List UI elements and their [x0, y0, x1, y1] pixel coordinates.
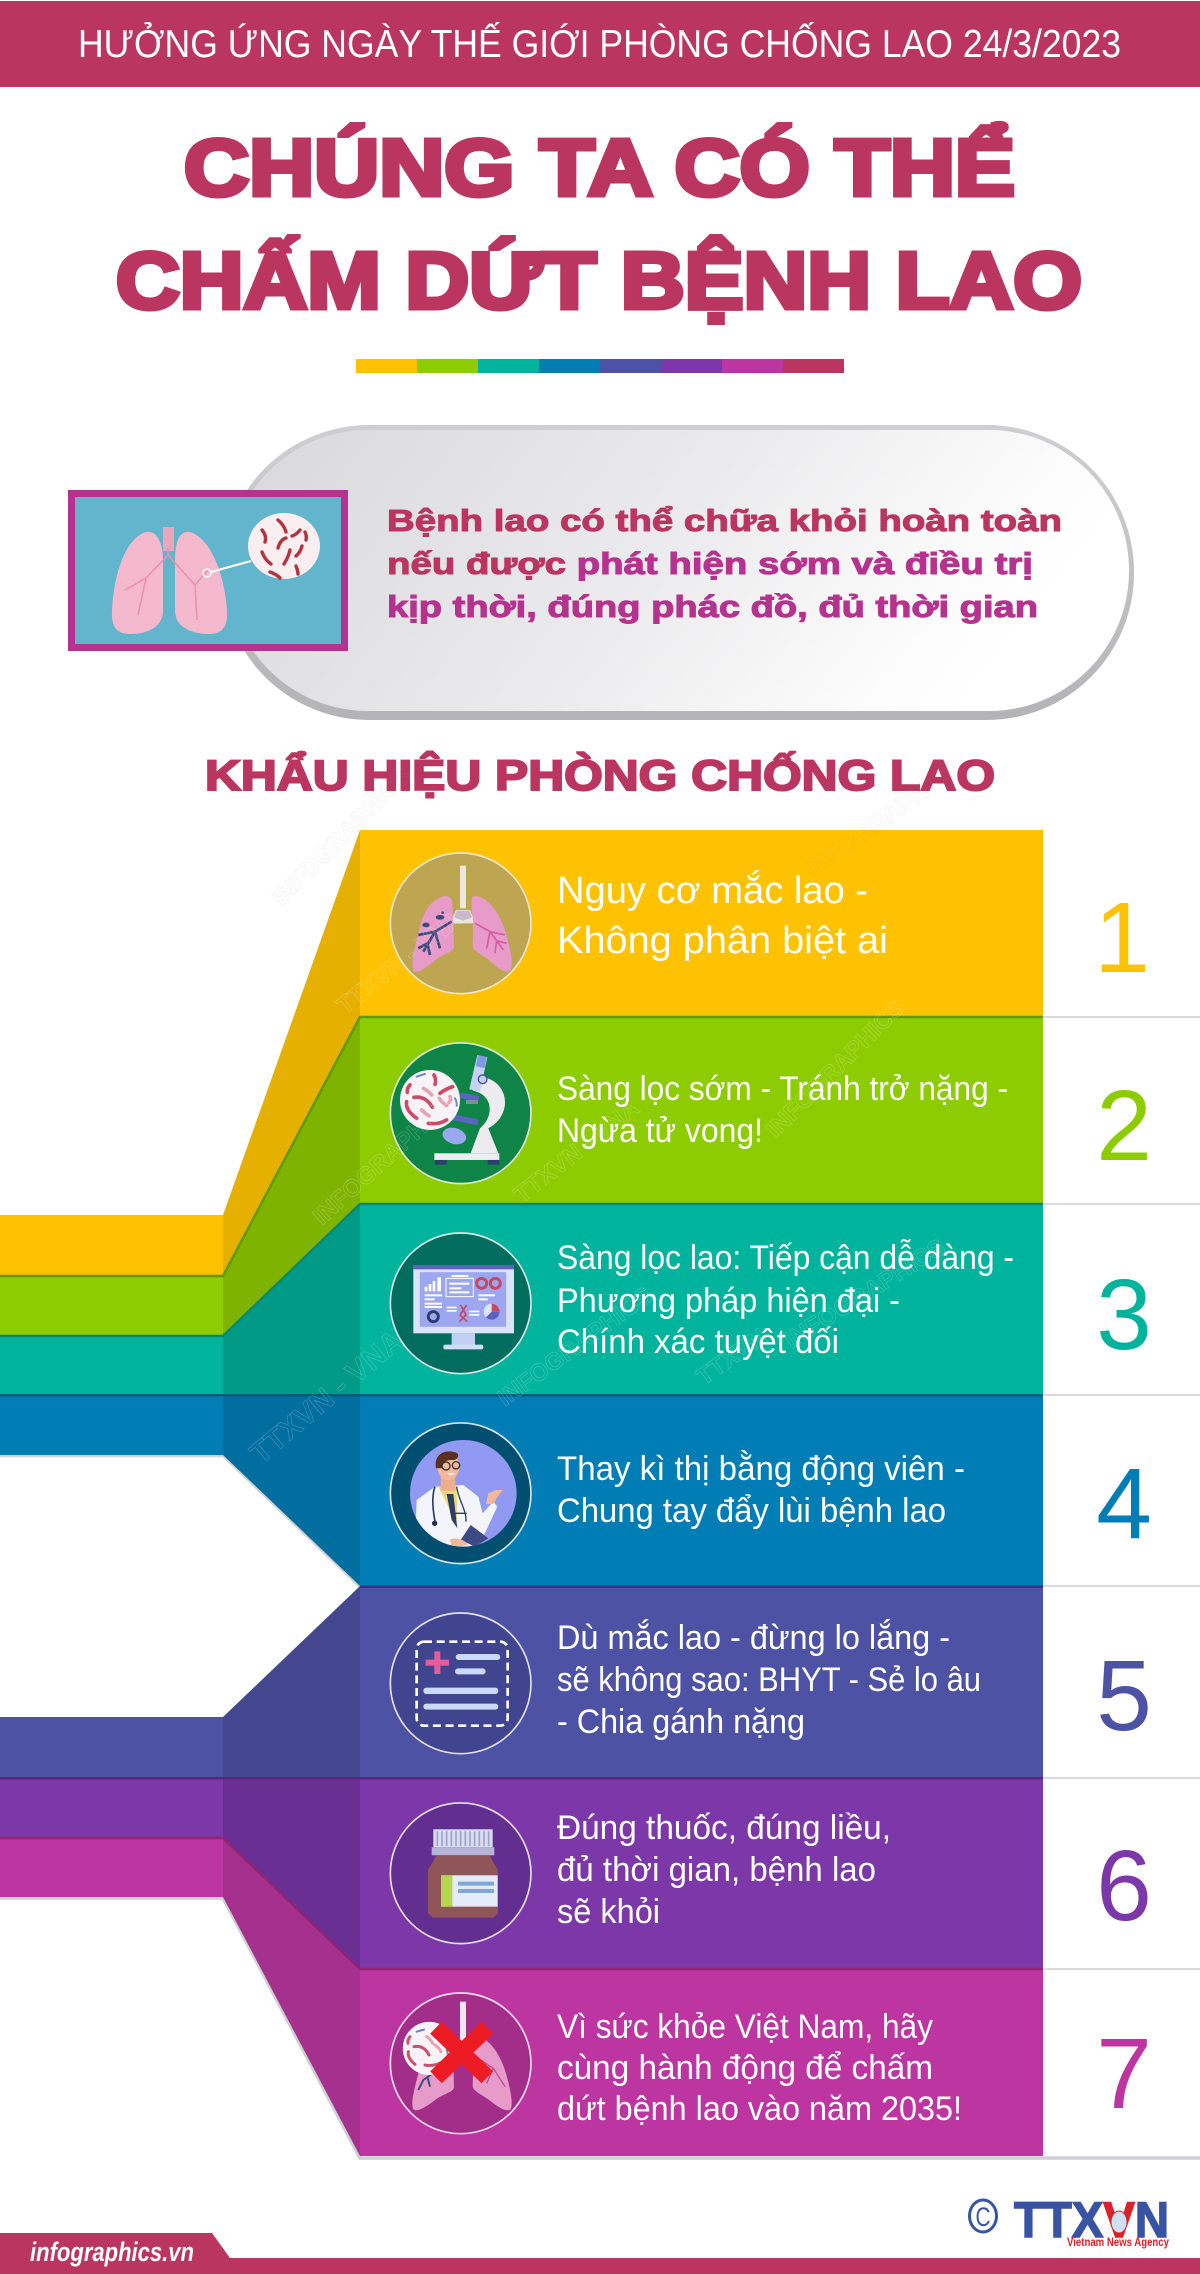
watermarks: INFOGRAPHICS: [761, 994, 910, 1143]
intro text: nếu được phát hiện sớm và điều trị: [387, 546, 1033, 581]
icon: lungs: [390, 853, 531, 994]
slogan 7 text: [557, 2008, 962, 2128]
panel: intro callout: [72, 425, 1134, 720]
number 1: 1: [1094, 882, 1150, 994]
slogan 2 text: Ngừa tử vong!: [557, 1112, 763, 1150]
icon: lungs with bacteria: [72, 494, 344, 648]
slogan 5 text: [557, 1619, 981, 1741]
panel: slogan 1: [0, 830, 1150, 1276]
slogan 5 text: sẽ không sao: BHYT - Sẻ lo âu: [557, 1661, 981, 1699]
icon: lungs crossed out: [390, 1993, 531, 2134]
footer: infographics.vn: [30, 2237, 194, 2267]
panel: slogan 7: [0, 1838, 1200, 2158]
intro text: kịp thời, đúng phác đồ, đủ thời gian: [387, 589, 1038, 624]
slogan 7 text: Vì sức khỏe Việt Nam, hãy: [557, 2008, 933, 2046]
slogan 3 text: [557, 1239, 1014, 1361]
watermarks: INFOGRAPHICS: [267, 762, 416, 911]
slogan 4 text: Chung tay đẩy lùi bệnh lao: [557, 1492, 946, 1530]
header banner: HƯỞNG ỨNG NGÀY THẾ GIỚI PHÒNG CHỐNG LAO 24/3/2023: [78, 21, 1121, 66]
slogan 1 text: Nguy cơ mắc lao -: [557, 869, 868, 912]
slogan 7 text: cùng hành động để chấm: [557, 2049, 933, 2087]
title: [116, 123, 1082, 325]
rainbow divider: [356, 359, 844, 373]
icon: microscope: [390, 1043, 531, 1184]
panel: slogan 3: [0, 1204, 1152, 1395]
slogan 3 text: Sàng lọc lao: Tiếp cận dễ dàng -: [557, 1239, 1014, 1277]
watermarks: TTXVN - VNA: [332, 906, 467, 1020]
watermarks: INFOGRAPHICS: [800, 755, 966, 883]
watermarks: [244, 755, 966, 1470]
slogan 6 text: [557, 1809, 891, 1931]
slogan 6 text: Đúng thuốc, đúng liều,: [557, 1809, 891, 1847]
slogan 2 text: Sàng lọc sớm - Tránh trở nặng -: [557, 1070, 1008, 1108]
slogan 2 text: [557, 1070, 1008, 1150]
number 2: 2: [1096, 1070, 1152, 1182]
watermarks: TTXVN - VNA: [244, 1324, 410, 1470]
panel: slogan 6: [0, 1777, 1152, 1969]
number 5: 5: [1096, 1640, 1152, 1752]
footer: [0, 2233, 1200, 2274]
slogan 1 text: Không phân biệt ai: [557, 920, 888, 962]
slogan 4 text: Thay kì thị bằng động viên -: [557, 1450, 965, 1488]
number 4: 4: [1096, 1448, 1152, 1560]
watermarks: INFOGRAPHICS: [780, 1234, 950, 1354]
number 7: 7: [1096, 2018, 1152, 2130]
slogan 1 text: [557, 869, 888, 962]
watermarks: INFOGRAPHICS: [308, 1087, 463, 1230]
slogan 5 text: Dù mắc lao - đừng lo lắng -: [557, 1619, 950, 1657]
panel: slogan 2: [0, 1017, 1152, 1336]
icon: monitor dashboard: [390, 1233, 531, 1374]
panel: slogan 4: [0, 1394, 1152, 1587]
number 3: 3: [1096, 1259, 1152, 1371]
logo: TTXVN: C: [976, 2202, 990, 2232]
title: CHẤM DỨT BỆNH LAO: [116, 236, 1082, 325]
watermarks: TTXVN: [692, 1324, 772, 1391]
intro text: [387, 503, 1062, 624]
slogan 6 text: đủ thời gian, bệnh lao: [557, 1851, 876, 1889]
slogan 5 text: - Chia gánh nặng: [557, 1703, 805, 1741]
panel: slogan 5: [0, 1586, 1152, 1778]
header banner: [0, 1, 1200, 87]
heading: slogans: KHẨU HIỆU PHÒNG CHỐNG LAO: [205, 751, 995, 800]
icon: doctor: [390, 1423, 531, 1564]
logo: TTXVN: TTXVN: [1014, 2192, 1169, 2248]
title: CHÚNG TA CÓ THỂ: [184, 123, 1015, 212]
slogan 6 text: sẽ khỏi: [557, 1893, 660, 1931]
slogan 3 text: Phương pháp hiện đại -: [557, 1282, 900, 1320]
watermarks: TTXVN - VNA: [509, 1095, 644, 1209]
number 6: 6: [1096, 1830, 1152, 1942]
slogan 4 text: [557, 1450, 965, 1530]
intro text: Bệnh lao có thể chữa khỏi hoàn toàn: [387, 503, 1062, 538]
logo: TTXVN: Vietnam News Agency: [1067, 2235, 1169, 2249]
slogan 3 text: Chính xác tuyệt đối: [557, 1323, 839, 1361]
slogan 7 text: dứt bệnh lao vào năm 2035!: [557, 2090, 962, 2128]
watermarks: INFOGRAPHICS: [493, 1282, 657, 1412]
icon: medicine bottle: [390, 1803, 531, 1944]
icon: insurance card: [390, 1613, 531, 1754]
